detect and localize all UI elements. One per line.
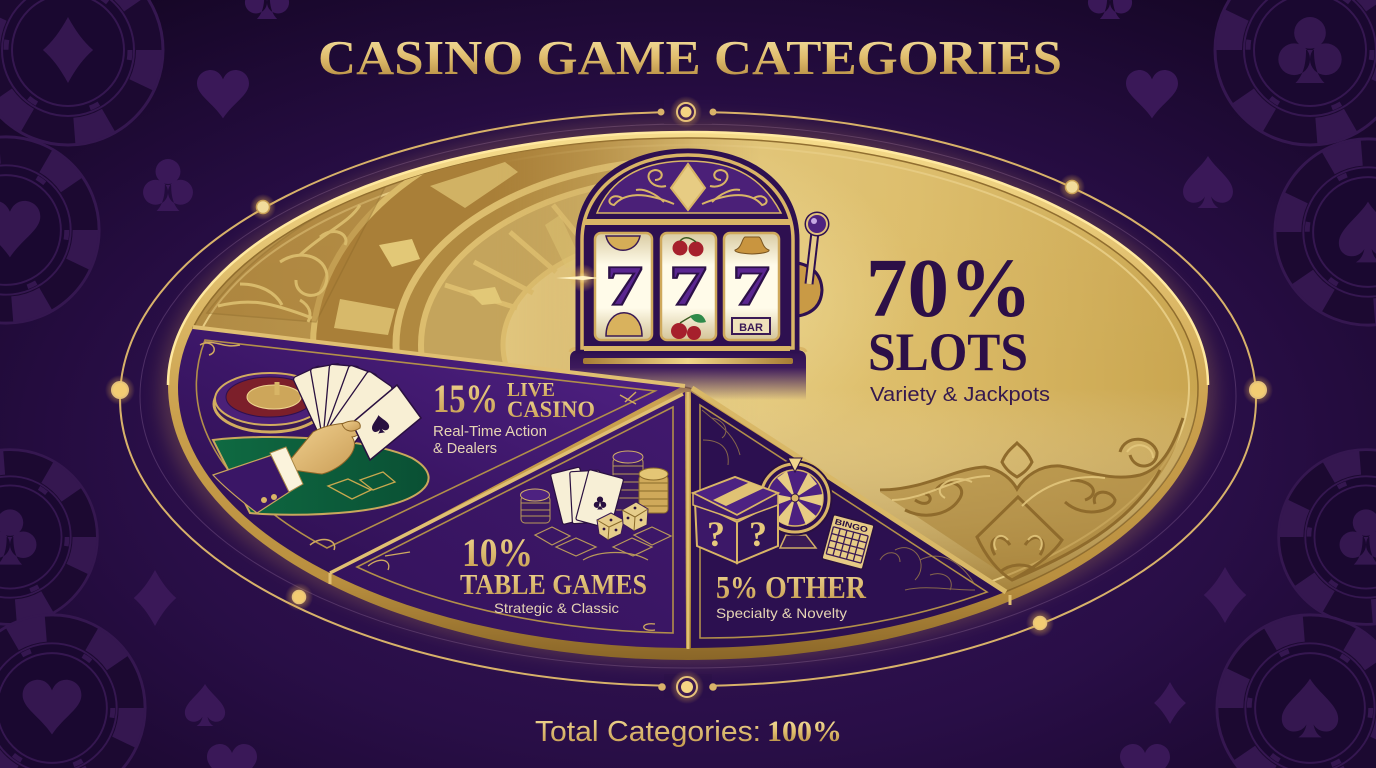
table games chips, cards and dice icon bbox=[520, 451, 671, 560]
chip: club, top right bbox=[1215, 0, 1376, 145]
slots label: SLOTS bbox=[868, 322, 1028, 382]
sparkle bbox=[556, 264, 600, 292]
slice: live casino 15% bbox=[178, 327, 683, 573]
reel 2 bbox=[661, 233, 716, 340]
roulette wheel icon bbox=[214, 373, 326, 432]
slots label bbox=[866, 242, 1050, 406]
filigree pattern bbox=[702, 410, 975, 590]
mystery box: ? bbox=[749, 514, 767, 554]
machine base bbox=[570, 350, 806, 400]
table games label: 10% bbox=[462, 530, 533, 575]
chip stacks bbox=[520, 451, 668, 523]
table layout outlines bbox=[535, 527, 671, 560]
reel 1 bbox=[595, 233, 652, 340]
chip: spade, bottom right bbox=[1217, 615, 1376, 768]
slice: slots 70% bbox=[192, 137, 1199, 592]
mystery box, prize wheel and bingo card icons bbox=[693, 458, 874, 570]
gold diamonds bbox=[334, 162, 582, 335]
dice bbox=[597, 502, 648, 540]
other label bbox=[716, 569, 867, 621]
reel 1: 7 bbox=[605, 255, 643, 318]
machine cabinet bbox=[577, 150, 798, 352]
mystery box: ? bbox=[707, 514, 725, 554]
footer total bbox=[535, 715, 842, 748]
chip: club, right bbox=[1279, 450, 1376, 624]
hand with fanned cards bbox=[213, 363, 421, 513]
chip: club, left bbox=[0, 450, 97, 624]
table cards bbox=[550, 467, 624, 529]
roulette pattern bbox=[310, 138, 733, 388]
pie rim bbox=[168, 132, 1208, 660]
bingo card: BINGO bbox=[834, 517, 869, 535]
chip: heart, bottom left bbox=[0, 615, 145, 768]
pie chart bbox=[160, 99, 1216, 664]
node: right bbox=[1243, 375, 1273, 405]
chip: spade, right bbox=[1275, 139, 1376, 325]
node: lower left bbox=[285, 583, 313, 611]
machine lever bbox=[798, 212, 830, 316]
machine crown ornament bbox=[597, 161, 781, 213]
slice: other 5% bbox=[193, 327, 1010, 649]
node: upper right bbox=[1059, 174, 1085, 200]
node: left bbox=[105, 375, 135, 405]
slice: table games 10% bbox=[330, 392, 686, 648]
footer total: Total Categories: bbox=[535, 716, 761, 748]
other label: 5% OTHER bbox=[716, 569, 867, 605]
other label: Specialty & Novelty bbox=[716, 605, 847, 621]
node: bottom bbox=[658, 670, 717, 704]
reel 2: 7 bbox=[669, 255, 707, 318]
live casino label: CASINO bbox=[507, 397, 595, 422]
node: upper left bbox=[250, 194, 276, 220]
chip: heart, left bbox=[0, 137, 99, 323]
table games label: Strategic & Classic bbox=[494, 600, 619, 616]
lower right ornament bbox=[880, 418, 1183, 580]
live casino label bbox=[433, 376, 595, 457]
live casino label: & Dealers bbox=[433, 441, 497, 457]
live casino label: Real-Time Action bbox=[433, 424, 547, 440]
title: CASINO GAME CATEGORIES bbox=[318, 30, 1062, 85]
bingo card bbox=[822, 514, 874, 570]
table games label: TABLE GAMES bbox=[460, 569, 647, 601]
slot machine icon bbox=[570, 150, 830, 400]
chip: diamond, top left bbox=[0, 0, 163, 145]
node: lower right bbox=[1026, 609, 1054, 637]
orbit ring with glowing nodes bbox=[105, 96, 1273, 704]
divider lines bbox=[193, 327, 1010, 649]
green felt table bbox=[213, 437, 429, 515]
left scroll ornament bbox=[207, 187, 385, 322]
BAR label: BAR bbox=[739, 322, 763, 334]
slots label: 70% bbox=[866, 242, 1032, 335]
table games label bbox=[460, 530, 647, 616]
prize wheel bbox=[759, 458, 831, 548]
reel 3: 7 bbox=[732, 255, 770, 318]
footer total: 100% bbox=[767, 715, 842, 748]
node: top bbox=[658, 96, 716, 128]
live casino label: LIVE bbox=[507, 379, 555, 401]
live casino label: 15% bbox=[433, 376, 498, 421]
reel 3 bbox=[724, 233, 779, 340]
mystery box bbox=[693, 477, 778, 563]
slots label: Variety & Jackpots bbox=[870, 384, 1050, 406]
